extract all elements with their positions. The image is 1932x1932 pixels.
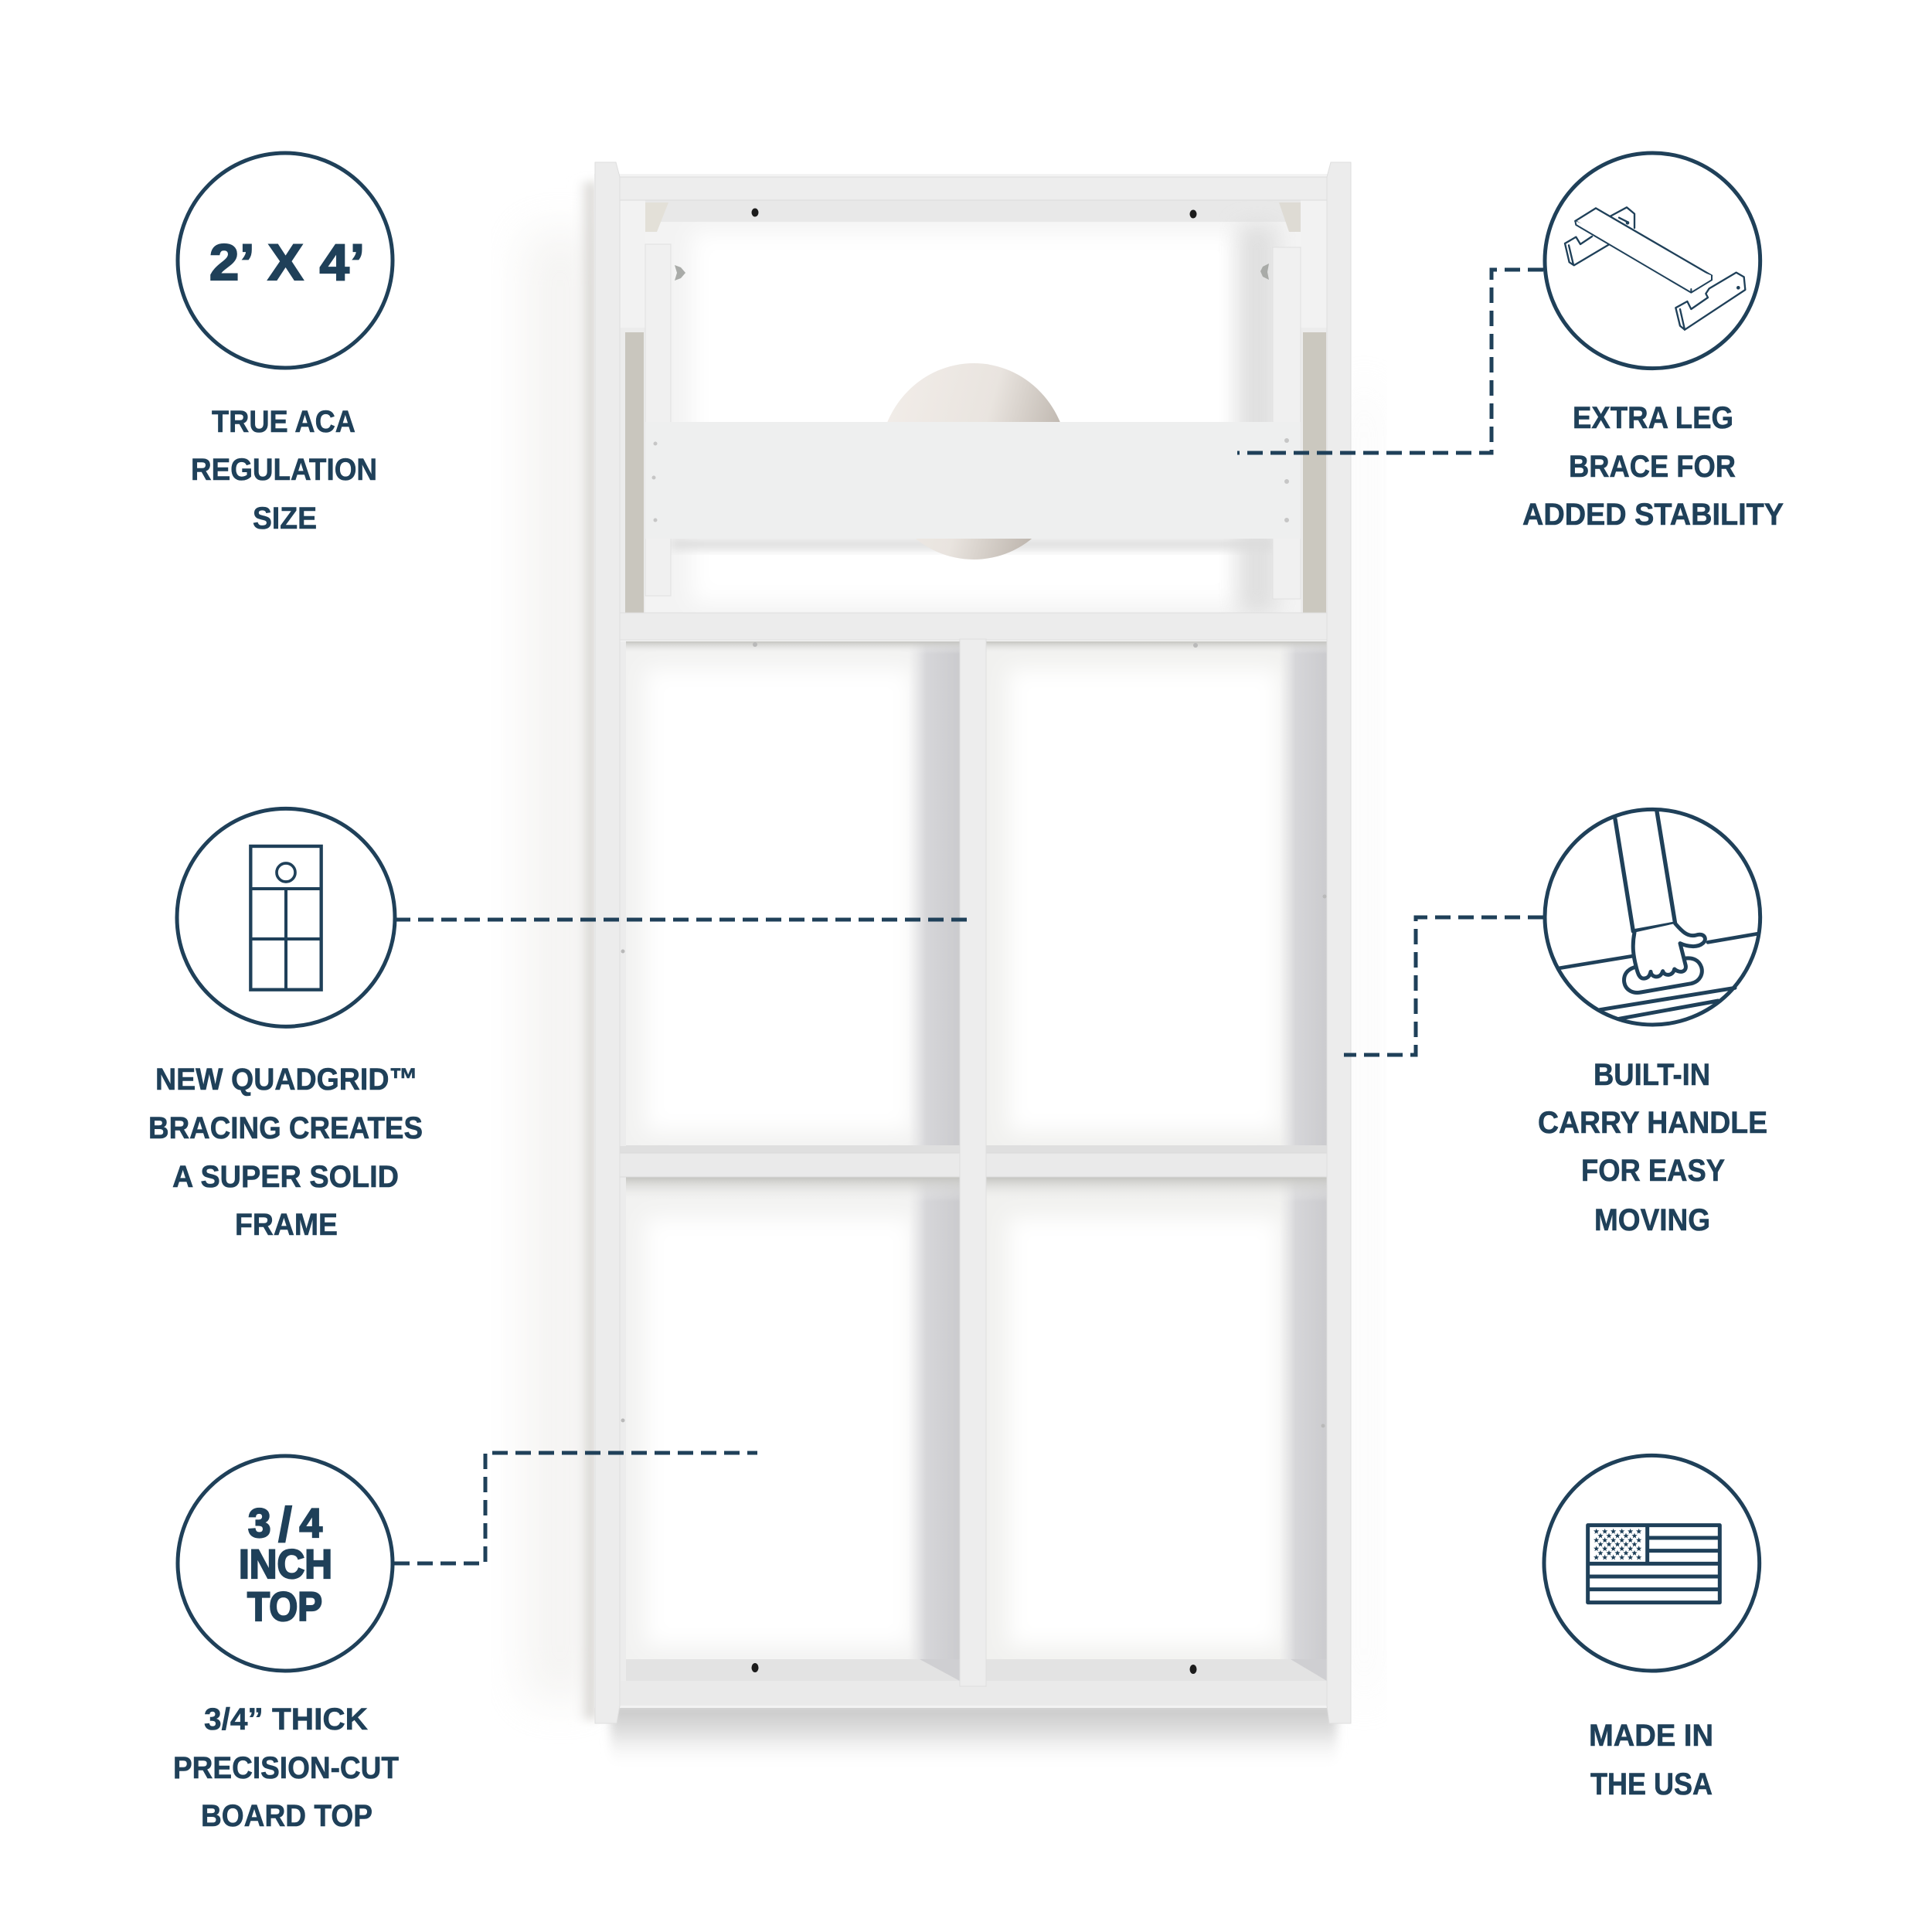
icon: quadgrid board	[177, 808, 395, 1026]
caption: thick top	[173, 1702, 399, 1833]
feature: quadgrid bracing	[148, 808, 423, 1242]
badge: 3/4 inch top: INCH	[239, 1542, 332, 1587]
cornhole hole	[879, 363, 1068, 560]
icon: hand on handle	[1545, 809, 1760, 1025]
icon: leg brace	[1545, 153, 1760, 369]
caption: true ACA size: TRUE ACA	[212, 405, 355, 439]
lower compartments	[619, 641, 1327, 1681]
arrow: quadgrid leader line	[395, 918, 967, 921]
feature: 3/4 inch top	[173, 1456, 399, 1833]
feature: 2 x 4 size	[178, 153, 393, 536]
caption: true ACA size: SIZE	[253, 502, 317, 536]
caption: extra leg brace	[1522, 401, 1784, 532]
arrow: leg brace leader line	[1237, 270, 1543, 453]
caption: carry handle	[1538, 1058, 1767, 1237]
center rail	[960, 639, 986, 1686]
board cast shadow	[526, 182, 1376, 1770]
feature: carry handle	[1538, 809, 1767, 1237]
caption: made in the USA: THE USA	[1590, 1767, 1713, 1801]
feature: extra leg brace	[1522, 153, 1784, 532]
top crossbar	[615, 177, 1330, 200]
badge: 2 x 4: 2’ X 4’	[209, 233, 366, 291]
badge: 3/4 inch top: 3	[248, 1501, 270, 1546]
arrow: board top leader line	[394, 1453, 757, 1563]
upper cavity shading	[645, 200, 1301, 614]
middle and lower crossbars	[617, 613, 1331, 1706]
outer side rails	[595, 162, 1351, 1723]
arrow: carry handle leader line	[1344, 917, 1543, 1055]
caption: made in the USA	[1589, 1719, 1713, 1801]
badge: 3/4 inch top: 4	[300, 1501, 323, 1546]
icon: american flag	[1544, 1455, 1760, 1671]
caption: carry handle: FOR EASY	[1581, 1154, 1725, 1188]
screw holes	[751, 209, 1196, 1674]
caption: quadgrid: A SUPER SOLID	[172, 1160, 399, 1194]
small fastener dots	[621, 642, 1326, 1428]
badge: 3/4 inch top: TOP	[247, 1584, 322, 1630]
caption: carry handle: CARRY HANDLE	[1538, 1106, 1767, 1140]
caption: true ACA size: REGULATION	[191, 453, 377, 487]
caption: thick top: 3/4” THICK	[204, 1702, 368, 1736]
side slots	[620, 200, 1328, 614]
caption: thick top: BOARD TOP	[201, 1799, 372, 1833]
caption: carry handle: MOVING	[1594, 1203, 1710, 1237]
caption: extra leg brace: ADDED STABILITY	[1522, 498, 1784, 532]
caption: quadgrid: NEW QUADGRID™	[155, 1063, 418, 1097]
caption: quadgrid: FRAME	[235, 1208, 338, 1242]
caption: extra leg brace: BRACE FOR	[1569, 450, 1736, 484]
folding legs	[645, 244, 1301, 599]
caption: quadgrid	[148, 1063, 423, 1242]
wing nuts	[675, 264, 1269, 281]
leg brace	[645, 422, 1301, 539]
cornhole board underside photo	[526, 162, 1376, 1770]
board base	[594, 174, 1351, 1708]
caption: thick top: PRECISION-CUT	[173, 1751, 399, 1785]
caption: quadgrid: BRACING CREATES	[148, 1111, 423, 1145]
badge: 3/4 inch top	[178, 1456, 393, 1671]
caption: carry handle: BUILT-IN	[1594, 1058, 1710, 1092]
badge: 2 x 4	[178, 153, 393, 368]
caption: extra leg brace: EXTRA LEG	[1573, 401, 1733, 435]
badge: 3/4 inch top: /	[278, 1498, 292, 1552]
caption: made in the USA: MADE IN	[1589, 1719, 1713, 1753]
caption: true ACA size	[191, 405, 377, 536]
feature: made in the USA	[1544, 1455, 1760, 1801]
